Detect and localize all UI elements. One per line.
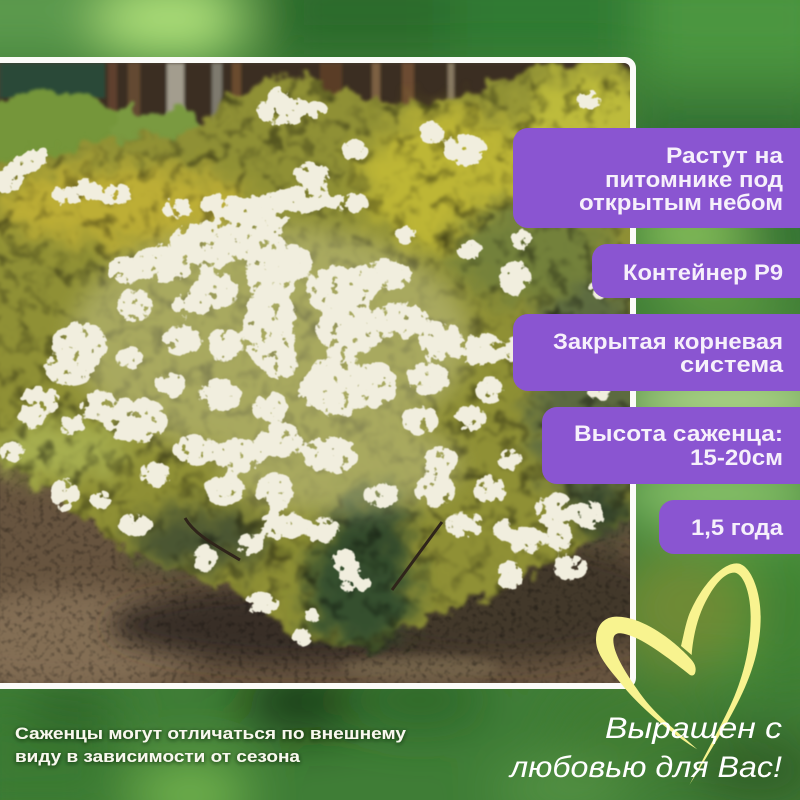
branches <box>185 518 442 590</box>
disclaimer note: виду в зависимости от сезона <box>15 747 301 766</box>
pill: grows outdoors <box>513 128 800 228</box>
disclaimer note: Саженцы могут отличаться по внешнему <box>15 724 407 743</box>
pill: grows outdoors: Растут на <box>666 143 784 168</box>
pill: container: Контейнер Р9 <box>623 260 783 285</box>
panel: photo with white frame <box>0 57 670 690</box>
pale wash under the blossoms <box>70 225 470 515</box>
disclaimer note <box>15 724 407 766</box>
slogan: Выращен с <box>605 712 782 745</box>
slogan <box>508 712 783 784</box>
slogan: любовью для Вас! <box>508 751 783 784</box>
photo frame <box>0 57 636 689</box>
icon: hand-drawn yellow heart <box>596 563 761 785</box>
pill: seedling height <box>542 407 800 484</box>
pill: seedling height: Высота саженца: <box>574 421 783 446</box>
pill: age <box>659 500 800 554</box>
pill: closed root system <box>513 314 800 391</box>
ground <box>0 463 630 683</box>
foliage <box>0 60 660 650</box>
background shrubs <box>0 86 202 166</box>
pill: grows outdoors: питомнике под <box>605 167 783 192</box>
photo: flowering spirea bush <box>0 60 670 690</box>
pill: grows outdoors: открытым небом <box>579 190 783 215</box>
pill: age: 1,5 года <box>691 515 784 540</box>
pill: seedling height: 15-20см <box>690 445 783 470</box>
pill: container <box>592 244 800 298</box>
flower clusters <box>0 86 622 647</box>
pill: closed root system: Закрытая корневая <box>553 329 783 354</box>
pill: closed root system: система <box>680 352 784 377</box>
